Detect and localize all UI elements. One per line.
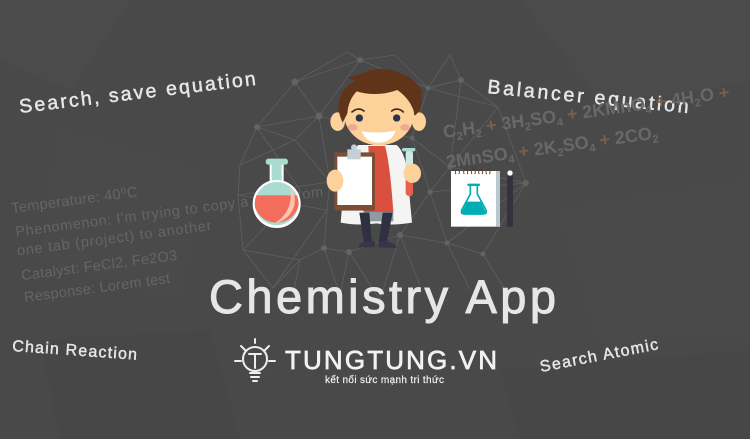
reaction details text block: Phenomenon: I'm trying to copy a layer from [15, 184, 324, 241]
chemical equation line 2: 2 [652, 133, 659, 146]
chemical equation line 2: 4 [589, 142, 597, 155]
chemical equation line 1: 2 [524, 121, 532, 134]
ears [330, 112, 345, 131]
chemical equation line 1: + [561, 103, 584, 125]
logo tagline: kết nối sức mạnh tri thức [325, 374, 444, 386]
reaction details text block: Catalyst: FeCl2, Fe2O3 [20, 248, 178, 284]
chemical equation line 2: 4 [508, 153, 516, 166]
chemical equation line 1: 2 [694, 97, 702, 110]
title: Chemistry App [209, 270, 556, 323]
chemical equation line 1: 4 [556, 116, 565, 129]
icon: notepad with flask [451, 169, 500, 227]
left hand [327, 170, 343, 192]
heading: search, save equation: Search, save equation [18, 68, 257, 118]
reaction details text block: one tab (project) to another [16, 218, 213, 260]
chemical equation line 1: 2 [456, 130, 464, 143]
shirt [363, 146, 393, 212]
chemical equation line 2: + [593, 128, 616, 151]
clipboard [334, 152, 375, 211]
chemical equation line 1: 3H [500, 111, 526, 134]
chemical equation line 1: 4 [645, 104, 653, 117]
chemical equation line 1: + [649, 90, 673, 113]
chemical equation line 2: 2K [533, 137, 558, 160]
reaction details text block [10, 161, 333, 306]
chemical equation line 2: 2 [557, 147, 565, 159]
right hand [404, 164, 421, 183]
chemical equation line 1: O [699, 84, 715, 106]
smile [362, 131, 396, 143]
chemical equation line 1: C [442, 120, 457, 142]
test tube [406, 150, 413, 196]
reaction details text block: Response: Lorem test [23, 271, 171, 306]
lab coat [341, 145, 412, 225]
label: search atomic: Search Atomic [539, 336, 660, 376]
chemical equation line 1: 4H [670, 87, 695, 110]
eyes and brows [356, 114, 363, 122]
face [344, 81, 414, 145]
heading: balancer equation: Balancer equation [487, 76, 690, 118]
cheeks [348, 124, 358, 131]
shorts and legs [364, 212, 393, 221]
chemical equation line 1: H [461, 118, 476, 139]
chemical equation line 1: 2 [475, 128, 483, 140]
chemical equation line 1: 2KMnO [581, 94, 646, 122]
chemical equation line 1: + [480, 114, 503, 137]
chemical equation line 2: + [512, 140, 535, 162]
molecular network background [238, 52, 526, 310]
shoes [358, 241, 397, 248]
chemical equation line 2: 2CO [614, 123, 653, 148]
chemical equation line 1: + [712, 82, 731, 104]
icon: round flask [254, 159, 300, 227]
hair [338, 69, 423, 123]
character: scientist [327, 69, 426, 248]
label: chain reaction: Chain Reaction [12, 338, 138, 364]
icon: pencil [507, 170, 513, 227]
illustration group [254, 69, 513, 248]
chemical equation line 2: 2MnSO [445, 144, 509, 172]
chemical equation line 1: SO [529, 106, 557, 130]
logo: tungtung.vn [235, 339, 497, 386]
icon: light bulb [235, 339, 275, 381]
reaction details text block: Temperature: 40⁰C [10, 185, 138, 217]
logo wordmark: TUNGTUNG.VN [285, 345, 497, 375]
chemical equation line 2: SO [561, 132, 590, 156]
